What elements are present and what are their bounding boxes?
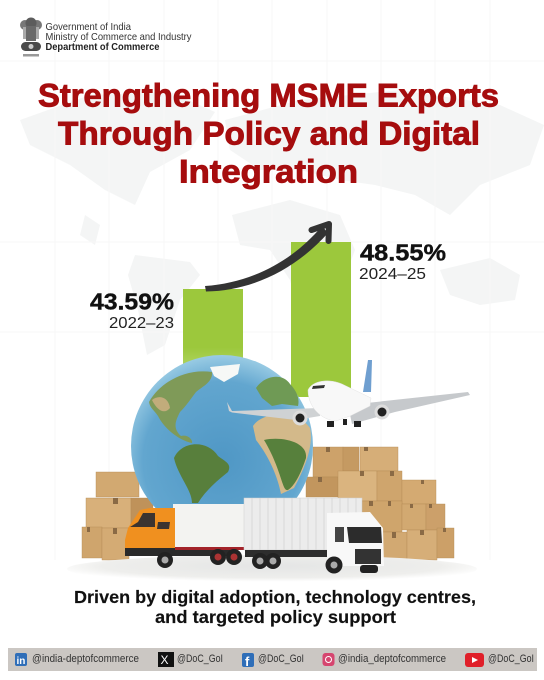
facebook: f [245,654,250,669]
linkedin [15,653,139,667]
globe [131,355,313,537]
instagram: @india_deptofcommerce [338,653,446,665]
X [158,652,223,667]
cardboard boxes left [82,472,153,560]
header: Government of India logo block [20,18,192,56]
airplane [227,360,470,427]
Greenland [210,364,240,382]
label 48.55% 2024-25 [359,240,446,283]
Africa [253,414,311,494]
illustration: globe, boxes, trucks, airplane [67,355,477,583]
world map background [20,90,544,355]
X: X [160,653,169,667]
floor shadow [67,555,477,583]
facebook [242,653,304,669]
arrow: upward trend [205,224,329,292]
title [38,78,499,190]
facebook: @DoC_GoI [258,653,304,665]
subheading: Driven by digital adoption, technology centres, [74,587,476,607]
truck: white [244,498,384,574]
label 43.59% 2022-23: 2022–23 [109,315,174,332]
North America [149,371,212,443]
subheading: and targeted policy support [155,607,396,627]
Europe [256,377,299,406]
bar chart: MSME export share [90,224,446,397]
X: @DoC_GoI [177,653,223,665]
bar 2022-23 [183,289,243,379]
agency name text: Government of India [46,21,131,33]
title: Strengthening MSME Exports [38,78,499,114]
title: Integration [179,154,358,190]
footer: social media bar [8,648,537,671]
subheading [74,587,476,627]
South America [174,444,229,503]
youtube [465,653,534,667]
truck: orange [125,504,246,568]
linkedin: @india-deptofcommerce [32,653,139,665]
linkedin: in [16,656,25,667]
title: Through Policy and Digital [58,116,480,152]
label 43.59% 2022-23: 43.59% [90,288,174,314]
icon: national emblem [20,18,42,56]
label 48.55% 2024-25: 2024–25 [359,266,426,283]
agency name text [46,21,192,53]
label 48.55% 2024-25: 48.55% [360,240,446,266]
cardboard boxes right [306,447,454,562]
label 43.59% 2022-23 [90,288,174,332]
bar 2024-25 [291,242,351,397]
youtube: @DoC_GoI [488,653,534,665]
agency name text: Ministry of Commerce and Industry [46,31,192,43]
agency name text: Department of Commerce [46,41,160,53]
